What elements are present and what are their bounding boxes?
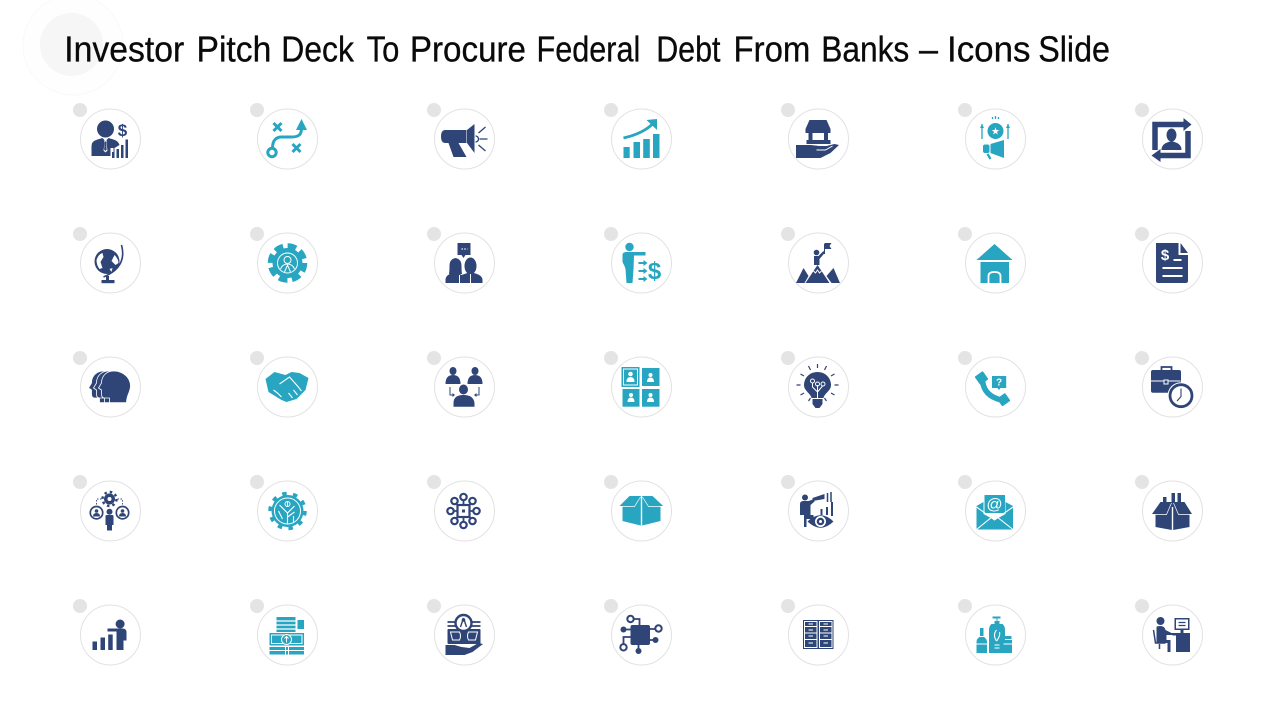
icon: house — [958, 227, 1026, 293]
icon: gear with people network — [73, 475, 140, 541]
icon: two people with speech bubble — [427, 227, 494, 293]
icon: person at computer desk — [1135, 599, 1202, 665]
title: From — [734, 28, 810, 69]
icon: open box — [604, 475, 672, 541]
icon: person with flag on mountain — [781, 227, 848, 293]
icon: cosmetic bottles — [958, 599, 1026, 665]
title: Banks — [821, 28, 909, 69]
icon: person with telescope and eye — [781, 475, 848, 541]
icon: handshake — [250, 351, 318, 417]
title: To — [367, 28, 399, 69]
icon: overlapping head profiles — [73, 351, 140, 417]
icon: email envelope — [958, 475, 1026, 541]
title: Slide — [1038, 28, 1110, 69]
icon: person pointing to dollar: $ — [648, 258, 662, 285]
title: Deck — [281, 28, 355, 69]
title: Investor — [64, 28, 184, 69]
title: Icons — [947, 28, 1030, 69]
icon: open box with bars — [1135, 475, 1202, 541]
icon: filing cabinet — [781, 599, 848, 665]
icon: growth chart with arrow — [604, 103, 672, 169]
icon: desk globe — [73, 227, 140, 293]
icon: businessman with dollar and bars — [73, 103, 140, 169]
title — [64, 28, 1110, 69]
title: Debt — [656, 28, 720, 69]
icon: invoice document with dollar: $ — [1161, 247, 1170, 264]
icon: telephone with question bubble: ? — [996, 378, 1002, 388]
title: Federal — [536, 28, 640, 69]
decorative corner circles — [23, 0, 123, 95]
icon: star badge and megaphone — [958, 103, 1026, 169]
icon: hand holding design compass — [427, 599, 494, 665]
title: Procure — [410, 28, 526, 69]
icon: person with bar chart — [73, 599, 140, 665]
icon: money stack with documents — [250, 599, 318, 665]
icon: light bulb with circuit — [781, 351, 848, 417]
icon: email envelope: @ — [986, 496, 1003, 514]
icon: businessman with dollar and bars: $ — [118, 121, 128, 140]
icon: star badge and megaphone: ★ — [991, 126, 1000, 138]
icon: strategy path with crosses — [250, 103, 318, 169]
icon: gear with figure — [250, 227, 318, 293]
icon: network hub — [427, 475, 494, 541]
icon: person pointing to dollar — [604, 227, 672, 293]
icon: circuit chip — [604, 599, 672, 665]
title: – — [919, 28, 939, 69]
icon: megaphone — [427, 103, 494, 169]
icon: profile with exchange arrows — [1135, 103, 1202, 169]
icon: three people connected — [427, 351, 494, 417]
icon: telephone with question bubble — [958, 351, 1026, 417]
icon: shop on open hand — [781, 103, 848, 169]
icon: invoice document with dollar — [1135, 227, 1202, 293]
icon: gear with tree — [250, 475, 318, 541]
title: Pitch — [196, 28, 271, 69]
icon: four profile tiles — [604, 351, 672, 417]
icon: briefcase with clock — [1135, 351, 1202, 417]
